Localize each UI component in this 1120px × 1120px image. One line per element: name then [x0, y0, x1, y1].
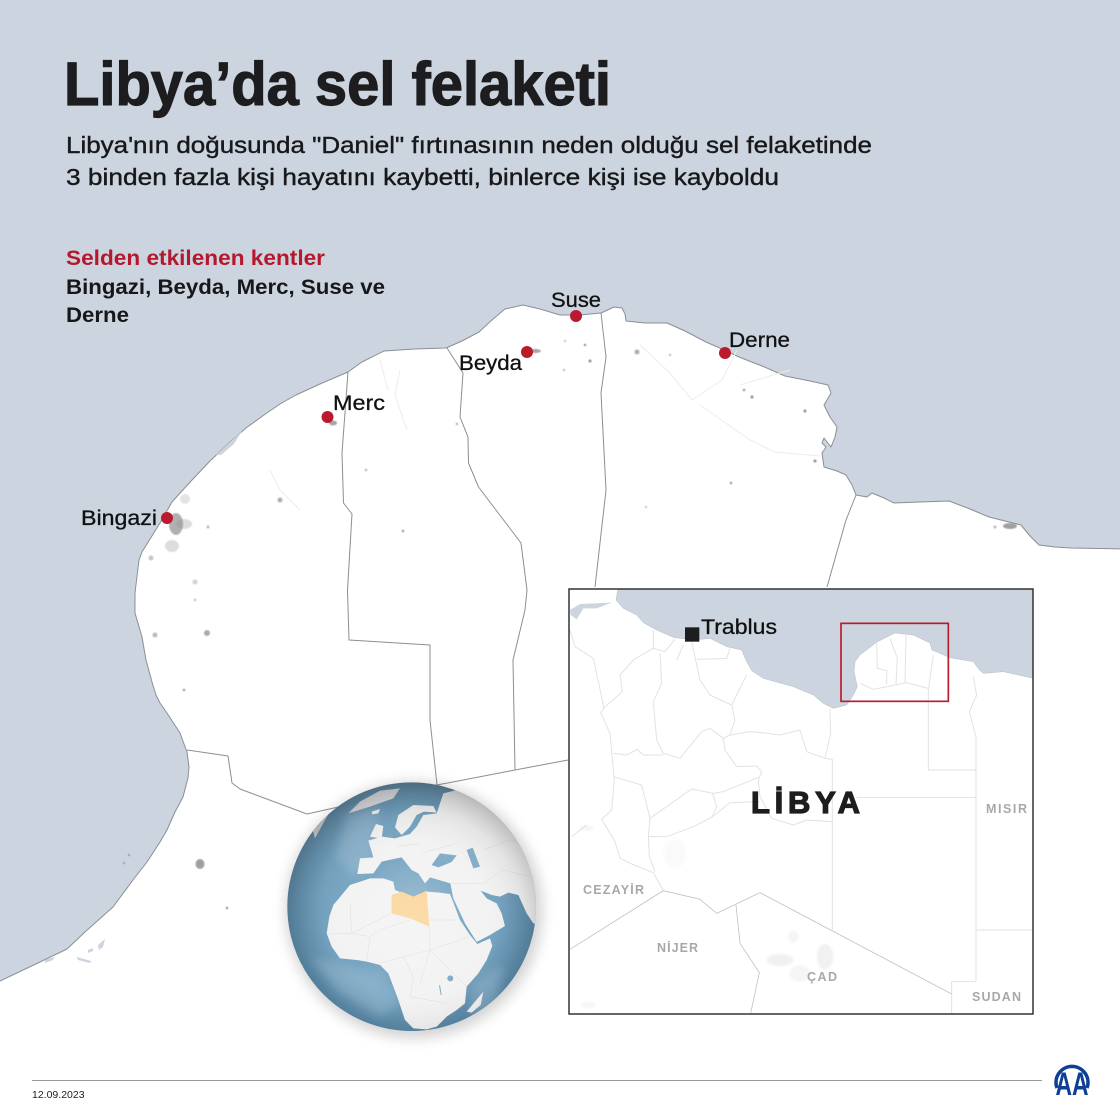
globe locator [286, 780, 550, 1038]
city marker: Derne [719, 328, 790, 359]
AA logo: AA [1056, 1066, 1088, 1102]
subtitle [66, 132, 872, 190]
inset city marker: Trablus [685, 627, 699, 642]
inset label: ÇAD: ÇAD [807, 970, 837, 984]
inset frame [569, 589, 1033, 1014]
affected cities text block: Selden etkilenen kentler [66, 247, 325, 270]
city marker: Bingazi: Bingazi [81, 506, 157, 530]
inset label: NİJER: NİJER [657, 940, 698, 955]
inset label: MISIR: MISIR [986, 802, 1027, 816]
inset label: Trablus: Trablus [701, 615, 777, 639]
affected cities text block: Bingazi, Beyda, Merc, Suse ve [66, 276, 385, 299]
inset lake shapes [570, 602, 612, 620]
affected cities text block [66, 247, 385, 327]
subtitle: Libya'nın doğusunda "Daniel" fırtınasının neden olduğu sel felaketinde [66, 132, 872, 158]
main map: eastern Libya land [0, 305, 1120, 1120]
city marker: Merc [322, 391, 385, 423]
globe country lines [330, 840, 543, 1003]
main map: regional borders [187, 313, 856, 814]
affected cities text block: Derne [66, 304, 129, 327]
globe inland seas [432, 848, 480, 995]
coastal lagoons [45, 431, 242, 963]
inset locator map [569, 587, 1033, 1014]
date: 12.09.2023 [32, 1089, 85, 1101]
footer rule [32, 1080, 1042, 1081]
city marker: Merc: Merc [333, 391, 385, 415]
inset label: LİBYA: LİBYA [751, 785, 860, 820]
globe Libya highlight [392, 891, 429, 927]
inset highland texture [580, 826, 833, 1008]
city marker: Beyda: Beyda [459, 351, 522, 375]
globe continents [302, 788, 536, 1030]
inset sea [616, 587, 1033, 708]
inset main borders [570, 891, 952, 1013]
inset regional borders [570, 630, 1033, 1013]
inset location frame [841, 623, 948, 701]
city marker: Suse [551, 288, 601, 322]
city marker: Beyda [459, 346, 533, 375]
city marker: Derne: Derne [729, 328, 790, 352]
inset label: CEZAYİR: CEZAYİR [583, 882, 644, 897]
title: Libya’da sel felaketi [64, 50, 611, 118]
inset label: SUDAN: SUDAN [972, 990, 1021, 1004]
terrain and settlement texture [123, 340, 1017, 909]
subtitle: 3 binden fazla kişi hayatını kaybetti, binlerce kişi ise kayboldu [66, 164, 779, 190]
globe ocean shelves [310, 807, 503, 1017]
terrain wadis [270, 345, 820, 510]
city marker: Suse: Suse [551, 288, 601, 312]
